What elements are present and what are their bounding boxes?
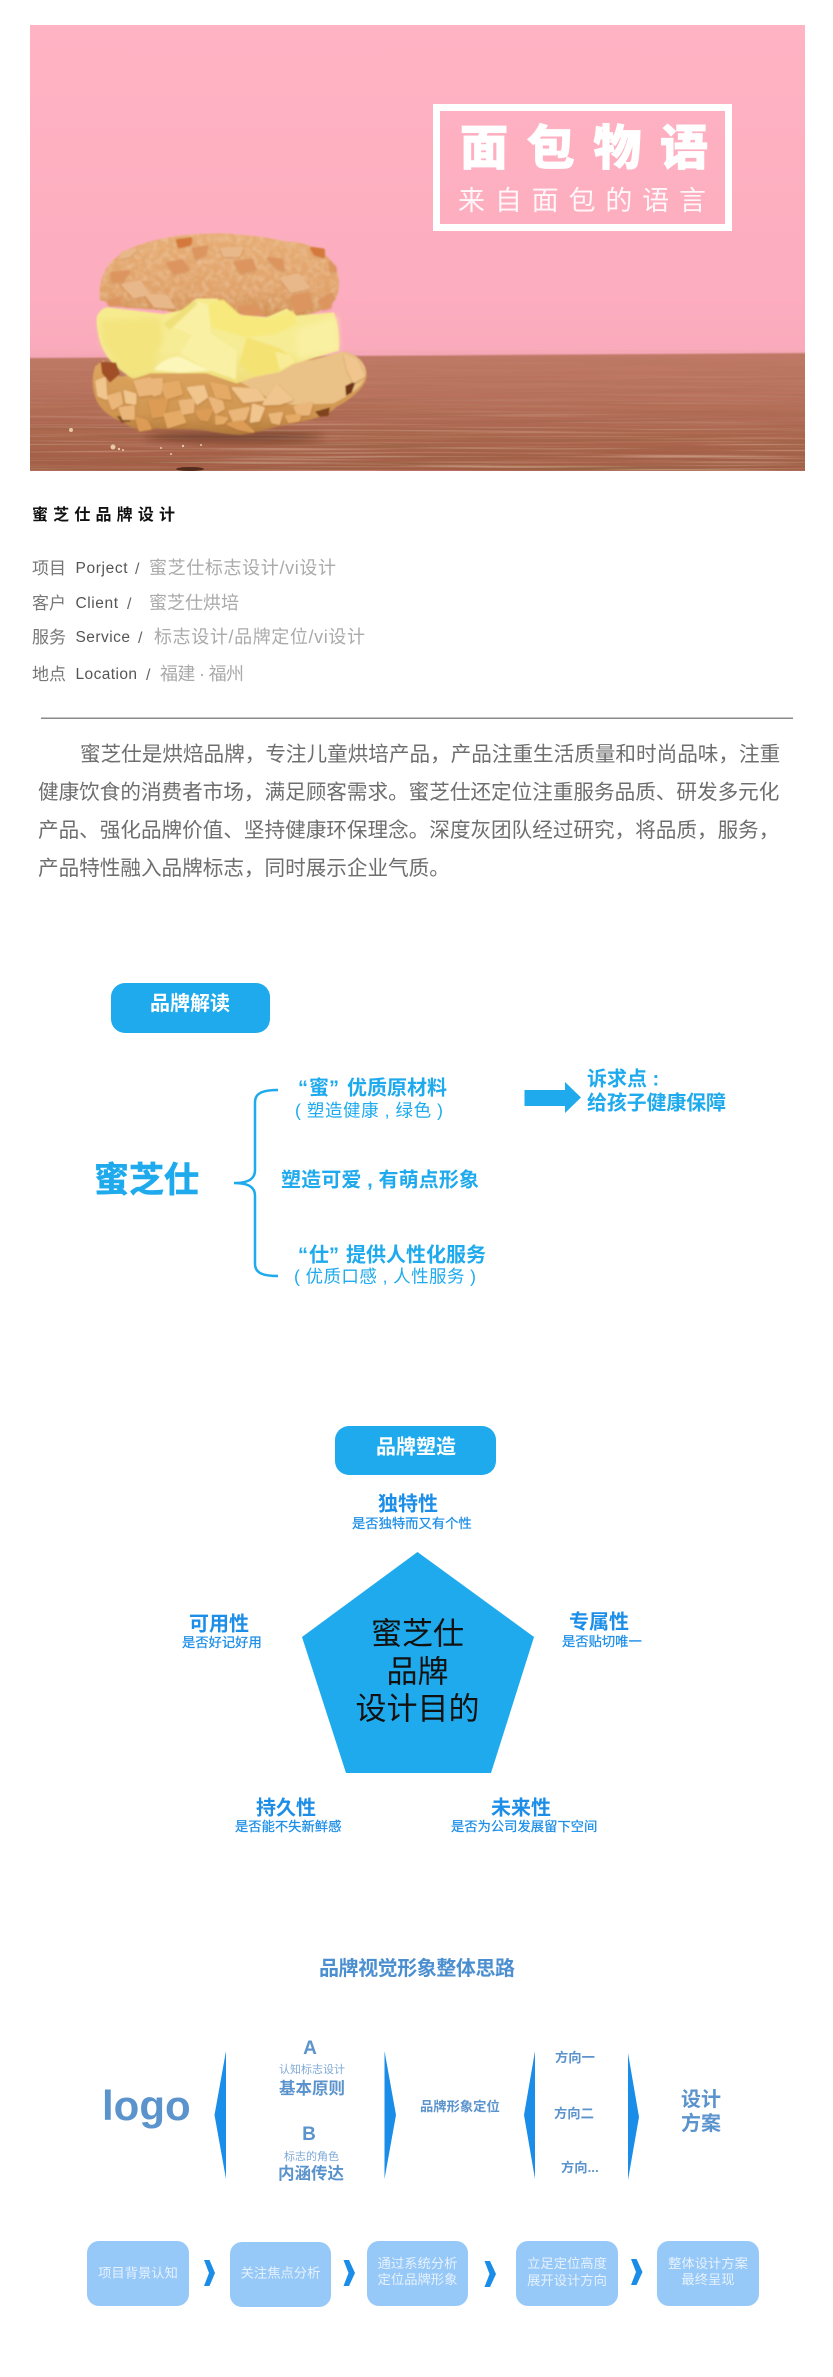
design proposal: 设计 <box>681 2088 721 2111</box>
info row: service: / <box>138 630 143 647</box>
info row: location: / <box>146 667 151 684</box>
attribute: durability: 持久性 <box>256 1796 316 1820</box>
step 4 <box>516 2241 618 2306</box>
principles column: A <box>303 2038 317 2059</box>
directions column: 方向二 <box>554 2105 594 2121</box>
info row: project <box>32 558 336 578</box>
hero title: 面包物语 <box>460 122 708 176</box>
info row: client: Client <box>76 595 119 612</box>
bracket: left lens 2 <box>524 2051 535 2179</box>
point: quality ingredients: 蜜 <box>309 1076 329 1100</box>
principles column: B <box>302 2124 316 2145</box>
pentagon <box>302 1552 534 1773</box>
attribute: usability: 是否好记好用 <box>182 1635 262 1650</box>
attribute: usability <box>182 1612 262 1650</box>
info row: location <box>32 664 244 684</box>
attribute: exclusivity: 专属性 <box>569 1610 629 1634</box>
info row: service <box>32 627 365 647</box>
bracket: left lens 1 <box>214 2051 226 2179</box>
appeal point: 诉求点 : <box>587 1068 659 1090</box>
attribute: usability: 可用性 <box>189 1612 249 1636</box>
step 4: 立足定位高度 <box>527 2255 607 2271</box>
bracket: right lens 1 <box>384 2051 396 2179</box>
principles column: 标志的角色 <box>284 2149 339 2163</box>
heading button: 品牌解读 <box>111 983 270 1033</box>
chevron 2 <box>344 2260 355 2286</box>
step 5: 整体设计方案 <box>668 2256 748 2271</box>
design proposal: 方案 <box>681 2111 721 2135</box>
project info list <box>32 558 365 684</box>
point: humanised service <box>294 1244 486 1286</box>
info row: project: 蜜芝仕标志设计/vi设计 <box>149 558 336 578</box>
point: quality ingredients: 优质原材料 <box>347 1076 447 1100</box>
point: humanised service: “ <box>298 1244 308 1266</box>
step 4: 展开设计方向 <box>527 2273 607 2288</box>
process flow <box>87 2241 759 2307</box>
intro paragraph: 蜜芝仕是烘焙品牌，专注儿童烘培产品，产品注重生活质量和时尚品味，注重 <box>80 743 780 766</box>
intro paragraph: 产品、强化品牌价值、坚持健康环保理念。深度灰团队经过研究，将品质，服务， <box>38 818 779 842</box>
chevron 3 <box>484 2261 496 2287</box>
info row: project: Porject <box>76 560 128 577</box>
pentagon: 品牌 <box>386 1654 448 1690</box>
info row: client: 客户 <box>32 594 66 613</box>
brand name: 蜜芝仕 <box>94 1161 199 1200</box>
hero subtitle: 来自面包的语言 <box>458 186 706 216</box>
point: humanised service: 仕 <box>309 1244 329 1266</box>
info row: client: 蜜芝仕烘培 <box>149 593 239 613</box>
attribute: future: 未来性 <box>491 1796 551 1820</box>
info row: client <box>32 593 239 613</box>
attribute: future: 是否为公司发展留下空间 <box>451 1819 597 1834</box>
brand image positioning: 品牌形象定位 <box>420 2098 500 2114</box>
attribute: durability: 是否能不失新鲜感 <box>235 1818 341 1834</box>
intro paragraph <box>38 743 780 880</box>
directions column: 方向... <box>561 2159 599 2175</box>
point: quality ingredients: ” <box>329 1078 339 1100</box>
heading button: 品牌塑造: 品牌塑造 <box>376 1436 456 1458</box>
point: humanised service: 提供人性化服务 <box>346 1244 486 1266</box>
intro paragraph: 产品特性融入品牌标志，同时展示企业气质。 <box>38 857 450 880</box>
info row: project: 项目 <box>32 559 66 578</box>
step 2 <box>230 2242 331 2307</box>
info row: service: 标志设计/品牌定位/vi设计 <box>154 627 365 647</box>
panel: brand shaping <box>182 1426 642 1834</box>
step 1: 项目背景认知 <box>98 2264 178 2280</box>
panel: brand visual thinking <box>102 1956 721 2183</box>
point: quality ingredients: ( 塑造健康 , 绿色 ) <box>295 1100 443 1120</box>
heading: project title: 蜜芝仕品牌设计 <box>32 505 175 524</box>
principles column: 内涵传达 <box>278 2164 344 2183</box>
attribute: uniqueness: 独特性 <box>378 1492 438 1516</box>
info row: location: Location <box>76 666 137 683</box>
heading button: 品牌解读: 品牌解读 <box>150 992 230 1015</box>
chevron 1 <box>204 2260 215 2286</box>
curly brace <box>234 1090 278 1276</box>
directions column <box>554 2049 599 2175</box>
hero title box <box>436 108 728 228</box>
step 3: 通过系统分析 <box>378 2256 457 2271</box>
directions column: 方向一 <box>555 2049 595 2065</box>
design proposal <box>681 2088 721 2135</box>
step 1 <box>87 2241 189 2306</box>
attribute: uniqueness <box>352 1492 472 1531</box>
hero crumbs on table <box>69 428 202 455</box>
attribute: exclusivity <box>562 1610 642 1649</box>
principles column: 基本原则 <box>279 2079 345 2098</box>
step 3 <box>367 2241 468 2306</box>
pentagon: 设计目的 <box>356 1692 480 1726</box>
pentagon: 蜜芝仕 <box>371 1616 464 1652</box>
attribute: uniqueness: 是否独特而又有个性 <box>352 1516 472 1531</box>
step 2: 关注焦点分析 <box>241 2266 320 2280</box>
attribute: exclusivity: 是否贴切唯一 <box>562 1634 642 1649</box>
heading button: 品牌塑造 <box>335 1426 496 1475</box>
hero photo banner <box>0 25 833 483</box>
panel: brand interpretation <box>94 983 726 1286</box>
info row: location: 福建 · 福州 <box>160 664 244 684</box>
info row: service: 服务 <box>32 628 66 647</box>
step 5 <box>657 2241 759 2306</box>
info row: location: 地点 <box>32 665 66 684</box>
point: quality ingredients <box>295 1076 447 1120</box>
logo word: logo <box>102 2082 191 2129</box>
principles column: 认知标志设计 <box>279 2062 345 2076</box>
principles column <box>278 2038 345 2183</box>
point: cute image: 塑造可爱 , 有萌点形象 <box>281 1168 479 1192</box>
attribute: durability <box>235 1796 341 1834</box>
step 3: 定位品牌形象 <box>378 2271 457 2287</box>
point: humanised service: ( 优质口感 , 人性服务 ) <box>294 1266 476 1286</box>
arrow <box>524 1082 581 1113</box>
section title: 品牌视觉形象整体思路 <box>319 1956 515 1980</box>
intro paragraph: 健康饮食的消费者市场，满足顾客需求。蜜芝仕还定位注重服务品质、研发多元化 <box>38 781 779 804</box>
info row: project: / <box>135 561 140 578</box>
point: humanised service: ” <box>329 1244 339 1266</box>
info row: service: Service <box>76 629 130 646</box>
info row: client: / <box>127 596 132 613</box>
chevron 4 <box>631 2259 642 2285</box>
appeal point: 给孩子健康保障 <box>587 1090 726 1114</box>
icon: cookie sandwich <box>93 233 367 435</box>
point: quality ingredients: “ <box>298 1078 308 1100</box>
attribute: future <box>451 1796 597 1834</box>
step 5: 最终呈现 <box>681 2272 735 2287</box>
bracket: right lens 2 <box>628 2053 639 2180</box>
appeal point <box>587 1068 726 1114</box>
